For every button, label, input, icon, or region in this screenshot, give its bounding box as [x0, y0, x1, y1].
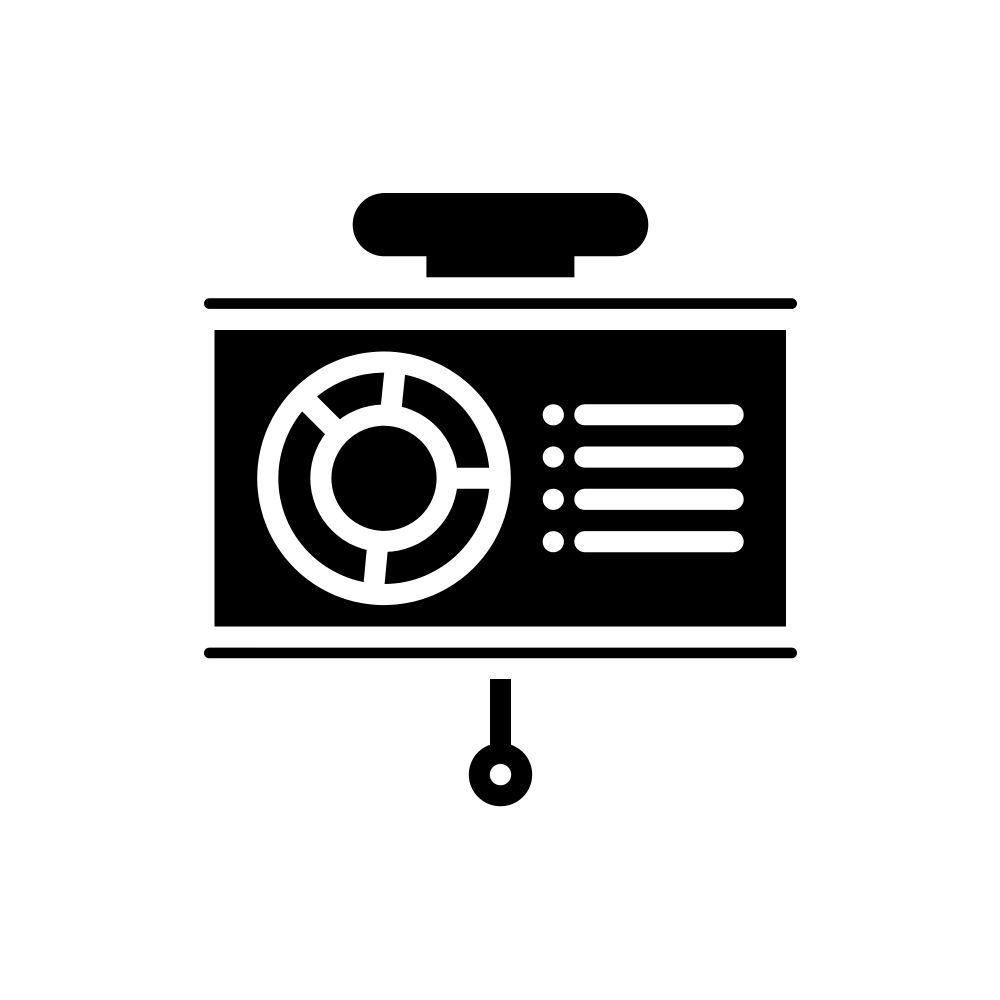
icon: pull cord with ring: [469, 679, 532, 806]
panel: screen: [214, 330, 786, 626]
bottom rail: [204, 648, 797, 658]
top rail: [204, 298, 797, 309]
chart: donut chart: [257, 352, 511, 605]
icon: roller housing: [353, 193, 648, 277]
legend: list rows: [543, 404, 744, 552]
